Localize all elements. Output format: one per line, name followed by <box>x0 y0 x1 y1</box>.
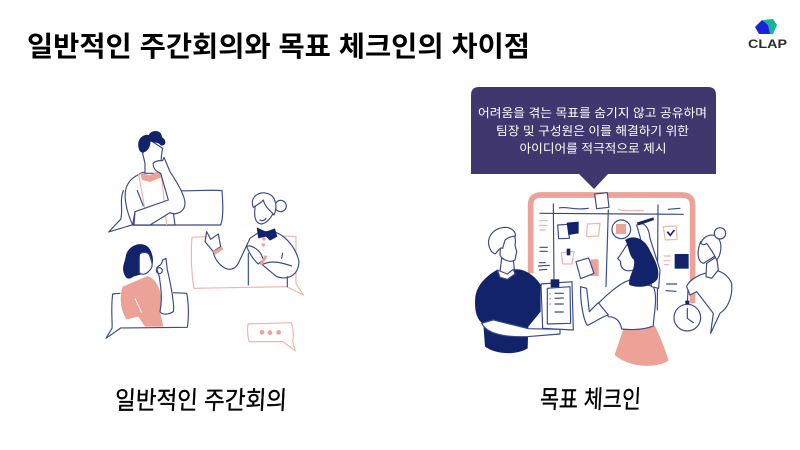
logo: CLAP <box>748 19 787 51</box>
label: regular weekly meeting: 일반적인 주간회의 <box>114 387 288 415</box>
illustration: weekly meeting video call <box>106 131 303 351</box>
figure: man with clipboard <box>475 227 573 353</box>
figure: thinking man <box>125 131 185 225</box>
label: goal check-in: 목표 체크인 <box>539 386 642 414</box>
figure: talking woman with bun <box>205 193 299 287</box>
illustration: goal check-in at a board <box>475 193 732 366</box>
figure: woman with stopwatch <box>674 228 732 333</box>
icon: stopwatch <box>674 290 701 331</box>
figure: woman making OK gesture <box>121 244 174 327</box>
speech bubble: woman on right <box>191 236 303 295</box>
figure: woman placing note on board <box>576 217 669 366</box>
title: 일반적인 주간회의와 목표 체크인의 차이점 <box>27 31 530 62</box>
callout: team shares difficult goals: 팀장 및 구성원은 이를 해결하기 위한 <box>496 124 689 138</box>
callout: team shares difficult goals: 어려움을 겪는 목표를 숨기지 않고 공유하며 <box>478 106 707 120</box>
speech bubble: top man <box>109 190 223 232</box>
callout: team shares difficult goals: 아이디어를 적극적으로 제시 <box>520 142 666 156</box>
icon: typing bubble <box>248 323 295 351</box>
callout: team shares difficult goals <box>471 87 716 189</box>
sticky notes <box>595 193 609 209</box>
logo: CLAP: CLAP <box>748 37 787 51</box>
kanban board <box>531 193 693 310</box>
speech bubble: bottom woman <box>106 293 188 338</box>
